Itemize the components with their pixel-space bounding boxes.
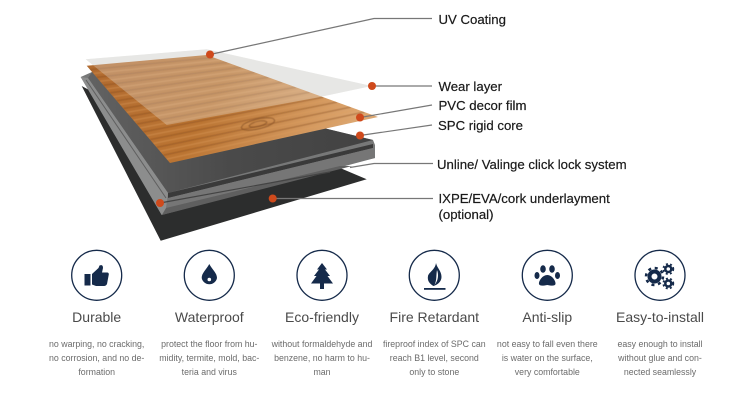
label: underlayment: (optional) — [438, 207, 493, 222]
label: Wear layer: Wear layer — [438, 79, 503, 94]
heading: Fire Retardant — [390, 309, 479, 325]
description: formation — [78, 367, 115, 377]
description: nected seamlessly — [624, 367, 697, 377]
description: without glue and con- — [617, 353, 702, 363]
label: SPC rigid core: SPC rigid core — [438, 118, 523, 133]
description: very comfortable — [515, 367, 580, 377]
description: benzene, no harm to hu- — [274, 353, 370, 363]
heading: Durable — [72, 309, 121, 325]
infographic canvas — [50, 14, 704, 377]
icon: paw print — [522, 250, 572, 300]
description: no warping, no cracking, — [49, 339, 144, 349]
description: without formaldehyde and — [272, 339, 372, 349]
icon: water drop — [184, 250, 234, 300]
feature: Durable — [49, 250, 144, 377]
description: fireproof index of SPC can — [383, 339, 486, 349]
layer: SPC rigid core — [81, 72, 375, 215]
layer: underlayment — [82, 86, 367, 241]
feature: Easy-to-install — [616, 250, 704, 377]
description: no corrosion, and no de- — [49, 353, 144, 363]
label: underlayment: IXPE/EVA/cork underlayment — [438, 191, 610, 206]
feature: Anti-slip — [497, 250, 598, 377]
callout dots — [156, 50, 376, 207]
icon: flame — [409, 250, 459, 300]
description: protect the floor from hu- — [161, 339, 257, 349]
icon: thumbs up — [72, 250, 122, 300]
feature: Waterproof — [159, 250, 259, 377]
heading: Easy-to-install — [616, 309, 704, 325]
icon: gears — [635, 250, 685, 300]
description: midity, termite, mold, bac- — [159, 353, 259, 363]
label: PVC decor film: PVC decor film — [438, 98, 526, 113]
layer: wear sheet backing — [86, 49, 372, 125]
layer: PVC decor film — [87, 55, 378, 163]
heading: Eco-friendly — [285, 309, 359, 325]
description: not easy to fall even there — [497, 339, 598, 349]
description: man — [313, 367, 331, 377]
description: teria and virus — [182, 367, 238, 377]
feature: Fire Retardant — [383, 250, 486, 377]
description: only to stone — [409, 367, 459, 377]
flooring layers diagram — [81, 49, 378, 241]
description: is water on the surface, — [502, 353, 593, 363]
heading: Waterproof — [175, 309, 244, 325]
heading: Anti-slip — [522, 309, 572, 325]
icon: pine tree — [297, 250, 347, 300]
label: click lock system: Unline/ Valinge click lock system — [437, 157, 627, 172]
layer: UV coating and wear layer — [86, 49, 372, 125]
feature: Eco-friendly — [271, 250, 372, 377]
callout lines — [160, 18, 433, 203]
label: UV Coating: UV Coating — [438, 12, 506, 27]
description: easy enough to install — [617, 339, 703, 349]
description: reach B1 level, second — [390, 353, 479, 363]
